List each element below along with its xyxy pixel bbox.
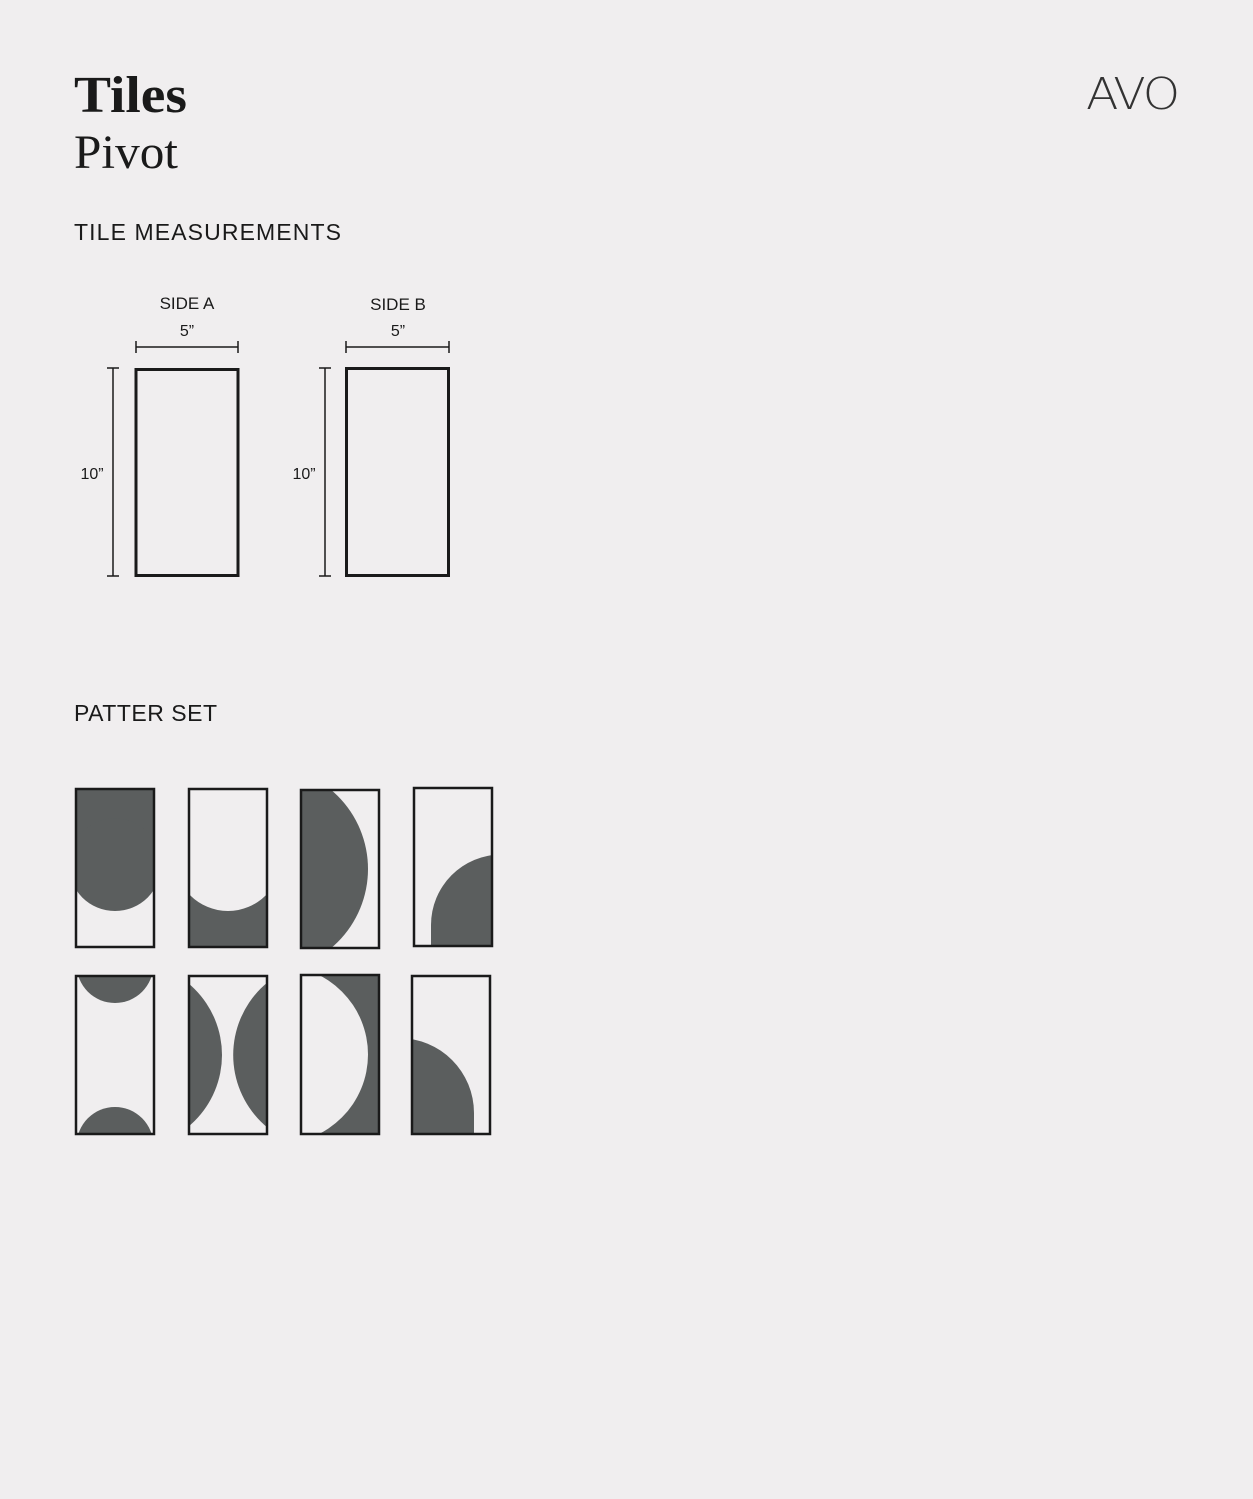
diagram: side B: 5” <box>391 323 405 340</box>
tile 7 <box>300 974 380 1136</box>
heading: pattern set: PATTER SET <box>74 700 217 726</box>
title <box>74 67 187 179</box>
diagram: side A: 5” <box>180 323 194 340</box>
title: Pivot <box>74 126 179 179</box>
diagram: side A: SIDE A <box>160 294 215 313</box>
tile 5 <box>74 974 156 1136</box>
diagram: side B <box>292 295 449 576</box>
diagram: side B: 10” <box>292 466 316 483</box>
logo: AVO <box>1086 69 1178 120</box>
tile 3 <box>300 788 380 950</box>
pattern set tiles <box>74 786 494 1136</box>
tile 4 <box>412 786 494 948</box>
tile 6 <box>188 974 268 1136</box>
diagram: side A: 10” <box>80 466 104 483</box>
tile 1 <box>74 788 156 948</box>
tile 2 <box>188 788 268 948</box>
diagram: side B: SIDE B <box>370 295 426 314</box>
heading: tile measurements: TILE MEASUREMENTS <box>74 219 341 245</box>
tile 8 <box>410 974 492 1136</box>
title: Tiles <box>74 67 187 124</box>
diagram: side A <box>80 294 238 576</box>
